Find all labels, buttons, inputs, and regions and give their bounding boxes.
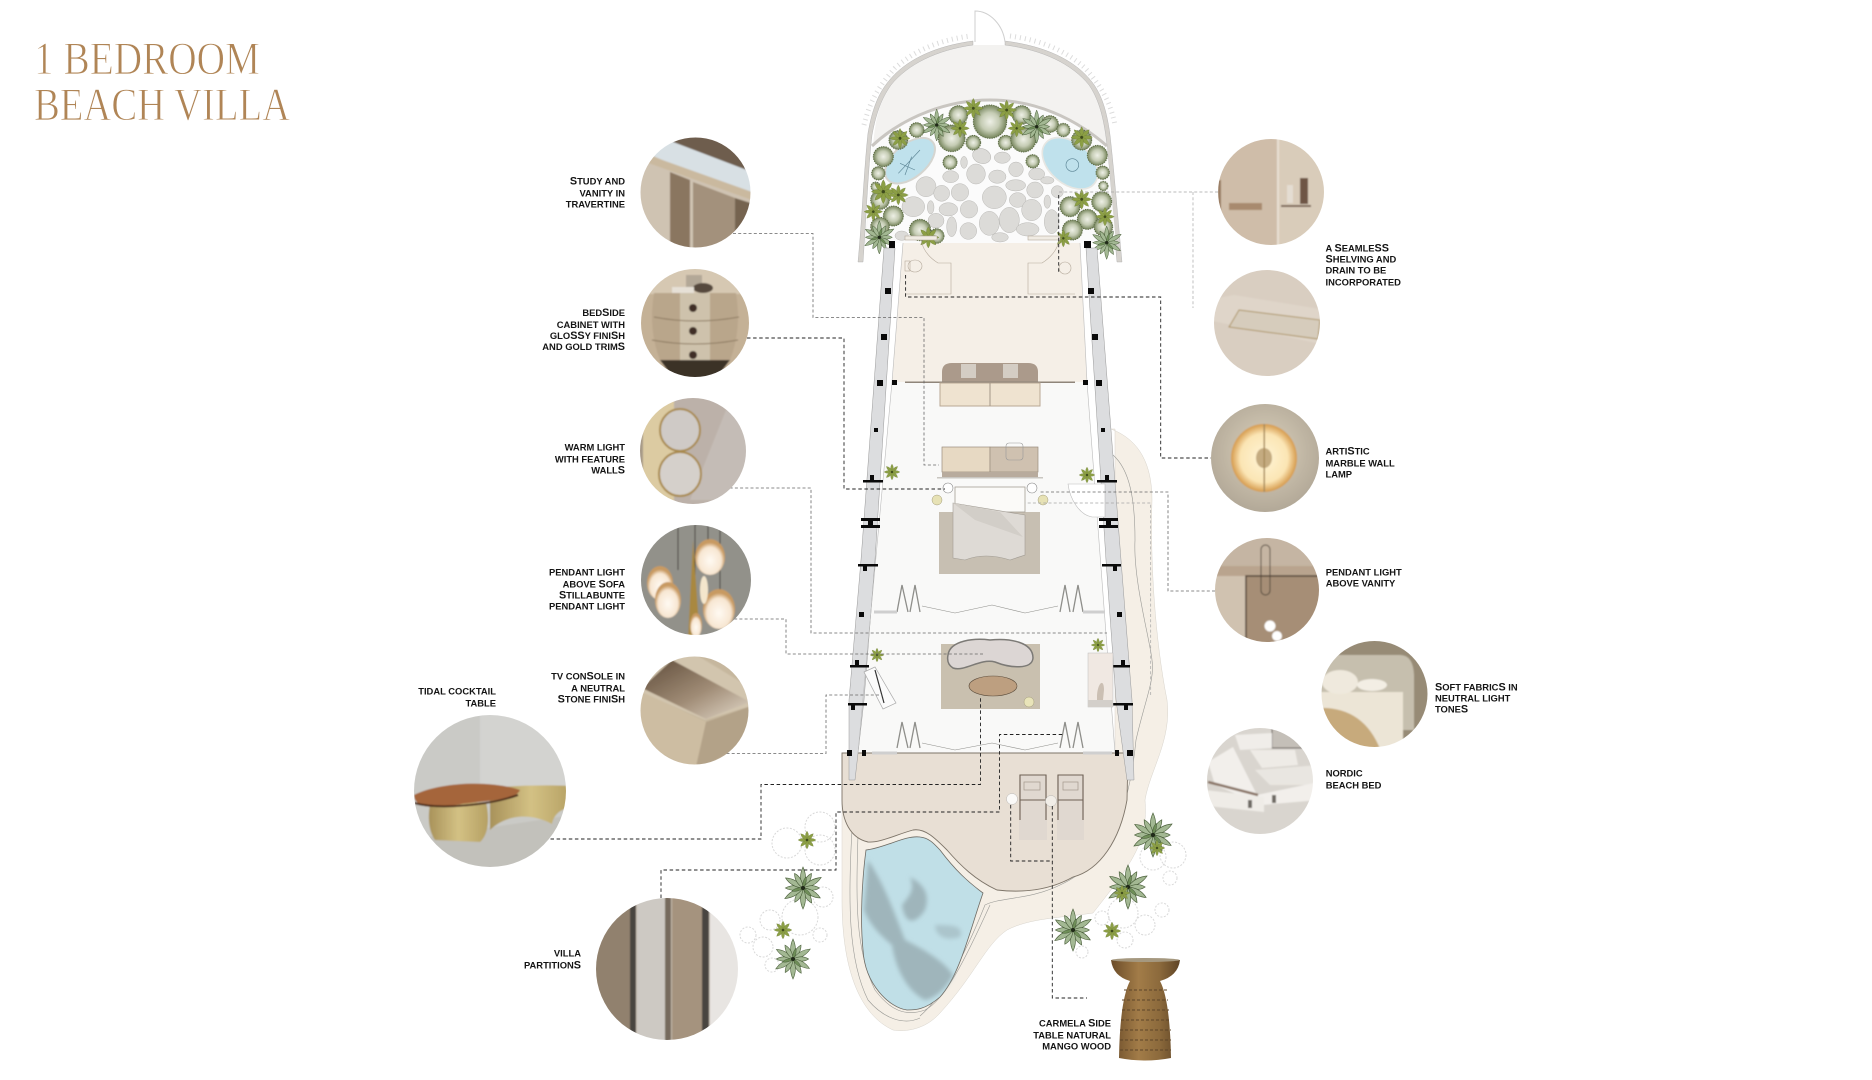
label: seamless shelving: INCORPORATED (1326, 276, 1401, 287)
material swatch: tv console stone (640, 656, 748, 764)
label: tidal cocktail table: TABLE (465, 697, 496, 708)
material swatch: nordic beach bed (1207, 728, 1313, 834)
label: bedside cabinet: GLOSSY FINISH (550, 330, 625, 342)
label: pendant light above sofa: PENDANT LIGHT (549, 600, 625, 611)
label: tv console: A NEUTRAL (571, 682, 625, 693)
label: seamless shelving: DRAIN TO BE (1326, 264, 1386, 275)
indoor plants (870, 464, 1105, 662)
label: seamless shelving: SHELVING AND (1326, 253, 1396, 265)
label: artistic lamp: MARBLE WALL (1326, 457, 1395, 468)
label: pendant light above vanity: ABOVE VANITY (1326, 577, 1396, 588)
label: bedside cabinet: CABINET WITH (557, 319, 625, 330)
label: tv console: TV CONSOLE IN (551, 670, 625, 682)
material swatch: pendant light above vanity (1215, 538, 1319, 642)
label: carmela side table: CARMELA SIDE (1039, 1017, 1111, 1029)
material swatch: pendant light above sofa (641, 525, 751, 635)
label: carmela side table: TABLE NATURAL (1033, 1029, 1111, 1040)
label: nordic beach bed: NORDIC (1326, 767, 1363, 778)
label: study and vanity: VANITY IN (580, 187, 625, 198)
label: study and vanity: TUDY AND (577, 175, 625, 186)
label: pendant light above sofa: STILLABUNTE (559, 589, 625, 601)
vanity unit (905, 363, 1075, 406)
pool details (898, 150, 1079, 175)
bathroom fixtures (905, 236, 1075, 294)
label: soft fabrics: SOFT FABRICS IN (1435, 681, 1518, 693)
ghost tree canopies (740, 812, 1186, 972)
label: warm light: WITH FEATURE (555, 453, 625, 464)
material swatch: travertine (640, 138, 750, 248)
tv console right and daybed left (864, 653, 1113, 709)
label: bedside cabinet: BEDSIDE (582, 307, 625, 319)
floor plan: villa (740, 11, 1186, 1031)
door swing (1068, 484, 1105, 517)
pool (862, 837, 983, 1010)
label: artistic lamp: LAMP (1326, 468, 1352, 479)
material swatch: drain (1214, 270, 1320, 376)
label: soft fabrics: NEUTRAL LIGHT (1435, 692, 1511, 703)
label: nordic beach bed: BEACH BED (1326, 779, 1382, 790)
label: tidal cocktail table: TIDAL COCKTAIL (418, 685, 496, 696)
beach surround (842, 429, 1168, 1031)
plunge pool right (1032, 127, 1108, 200)
label: villa partitions: PARTITIONS (524, 959, 581, 971)
plunge pool left (877, 129, 943, 192)
desk (937, 443, 1043, 478)
garden court walls (858, 11, 1122, 262)
label: warm light: WARM LIGHT (565, 441, 625, 452)
title: BEACH VILLA (34, 79, 290, 131)
shrubs (871, 105, 1113, 243)
label: pendant light above sofa: ABOVE SOFA (563, 578, 625, 590)
label: villa partitions: VILLA (554, 947, 581, 958)
label: pendant light above sofa: PENDANT LIGHT (549, 566, 625, 577)
bedroom and living floor (858, 382, 1115, 753)
bed (932, 483, 1048, 574)
outdoor plants (774, 813, 1173, 979)
stepping stones (895, 146, 1063, 242)
living room rug and sofa (941, 639, 1040, 709)
leader lines (550, 192, 1218, 998)
garden stones, shrubs and plunge pools (864, 98, 1122, 259)
label: seamless shelving: A SEAMLESS (1326, 242, 1389, 254)
material swatch: tidal cocktail table (414, 715, 566, 867)
material swatch: marble wall lamp (1211, 404, 1319, 512)
label: carmela side table: MANGO WOOD (1042, 1040, 1111, 1051)
material swatch: villa partitions (596, 898, 738, 1040)
villa side walls and columns (847, 241, 1134, 780)
label: study and vanity: S (570, 175, 577, 187)
material swatch: warm light (640, 398, 746, 504)
label: warm light: WALLS (591, 464, 625, 476)
folding doors and curtains (872, 585, 1112, 753)
label: artistic lamp: ARTISTIC (1326, 445, 1370, 457)
material swatch: seamless shelving (1218, 139, 1324, 245)
label: pendant light above vanity: PENDANT LIGHT (1326, 566, 1402, 577)
timber deck (842, 753, 1128, 891)
label: bedside cabinet: AND GOLD TRIMS (542, 341, 625, 353)
label: soft fabrics: TONES (1435, 703, 1468, 715)
title: 1 BEDROOM (34, 33, 260, 85)
label: tv console: STONE FINISH (558, 693, 625, 705)
material: carmela side table (1111, 958, 1180, 1060)
bathroom and vanity floor (892, 243, 1087, 382)
material swatch: bedside cabinet (641, 269, 749, 377)
garden plants (864, 98, 1122, 259)
sun loungers (1006, 775, 1084, 840)
contour lines (850, 455, 1153, 1021)
material swatch: soft fabrics (1322, 641, 1428, 747)
title (34, 33, 290, 131)
label: study and vanity: TRAVERTINE (566, 198, 625, 209)
